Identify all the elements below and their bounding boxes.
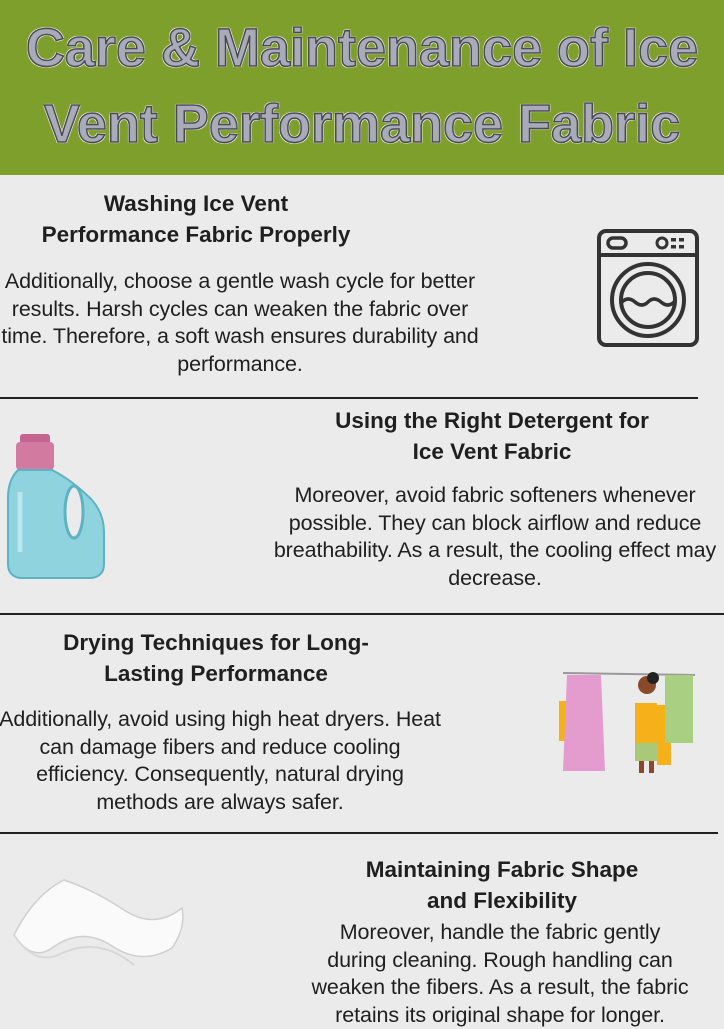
section 4 heading: and Flexibility xyxy=(427,888,577,913)
section 3 heading: Lasting Performance xyxy=(104,661,328,686)
title xyxy=(26,18,698,154)
header banner xyxy=(0,0,724,175)
section 4 heading: Maintaining Fabric Shape xyxy=(366,857,638,882)
icon: folded white fabric xyxy=(13,879,184,966)
section 3 heading: Drying Techniques for Long- xyxy=(63,630,369,655)
section 2 text: decrease. xyxy=(448,566,542,590)
icon: washing machine xyxy=(597,229,699,347)
section 2 heading: Using the Right Detergent for xyxy=(335,408,649,433)
section 3 text: methods are always safer. xyxy=(96,790,344,814)
section 1 text: time. Therefore, a soft wash ensures durability and xyxy=(1,324,479,348)
section 1 heading xyxy=(42,191,350,247)
section 4 text: during cleaning. Rough handling can xyxy=(327,948,673,972)
title: Vent Performance Fabric xyxy=(44,94,680,154)
section 1 text xyxy=(1,269,479,376)
section 2 text xyxy=(274,483,716,590)
section 3 text: efficiency. Consequently, natural drying xyxy=(36,762,404,786)
section 2 heading: Ice Vent Fabric xyxy=(413,439,571,464)
section 3 text xyxy=(0,707,441,814)
icon: woman hanging laundry xyxy=(559,672,695,773)
section 2 text: Moreover, avoid fabric softeners whenever xyxy=(294,483,696,507)
section 3 text: Additionally, avoid using high heat dryers. Heat xyxy=(0,707,441,731)
section 2 text: breathability. As a result, the cooling effect may xyxy=(274,538,716,562)
section 1 heading: Performance Fabric Properly xyxy=(42,222,350,247)
section 1 text: results. Harsh cycles can weaken the fabric over xyxy=(12,297,468,321)
section 4 text: retains its original shape for longer. xyxy=(335,1003,665,1027)
section 1 heading: Washing Ice Vent xyxy=(104,191,288,216)
section 4 heading xyxy=(366,857,638,913)
icon: detergent bottle xyxy=(7,434,105,579)
section 1 text: performance. xyxy=(177,352,303,376)
section 4 text xyxy=(311,920,689,1027)
section 4 text: weaken the fibers. As a result, the fabric xyxy=(311,975,689,999)
section 4 text: Moreover, handle the fabric gently xyxy=(340,920,660,944)
section 3 heading xyxy=(63,630,369,686)
title: Care & Maintenance of Ice xyxy=(26,18,698,78)
section 1 text: Additionally, choose a gentle wash cycle for better xyxy=(5,269,475,293)
section 2 text: possible. They can block airflow and reduce xyxy=(289,511,701,535)
section 2 heading xyxy=(335,408,649,464)
section 3 text: can damage fibers and reduce cooling xyxy=(40,735,400,759)
